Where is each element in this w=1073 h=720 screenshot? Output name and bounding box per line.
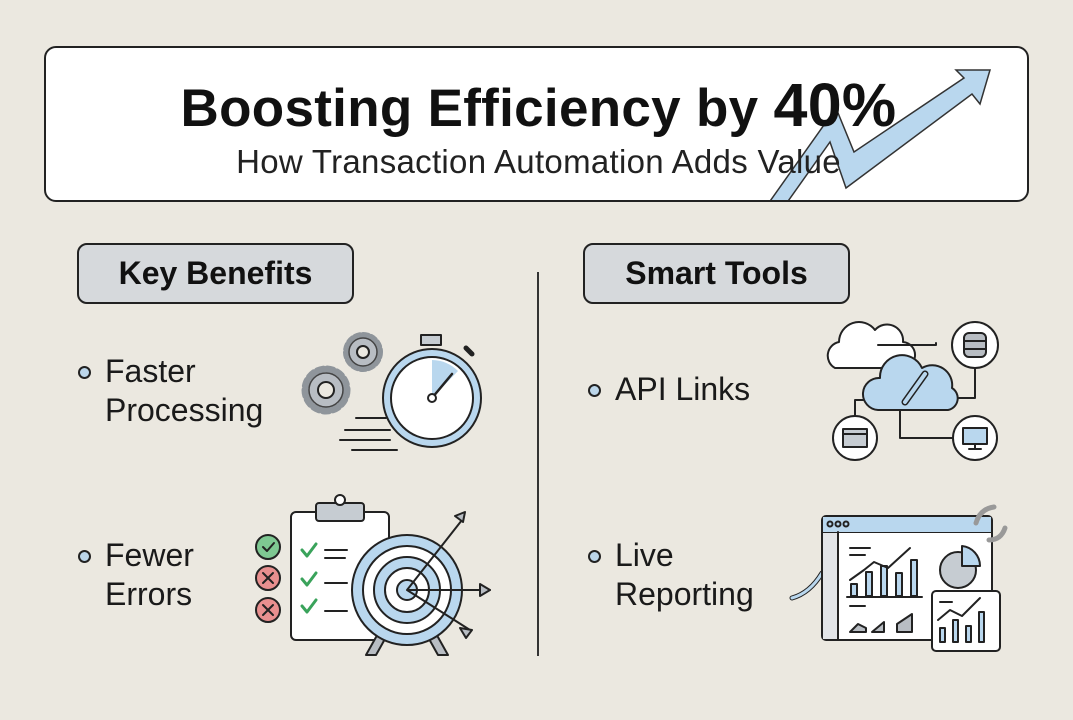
text: Fewer Errors: Fewer xyxy=(105,537,194,573)
text: Live Reporting: Reporting xyxy=(615,576,754,612)
heading: Key Benefits xyxy=(77,243,354,304)
icon: stopwatch with gears xyxy=(305,335,481,450)
heading: Smart Tools xyxy=(583,243,850,304)
divider xyxy=(537,272,539,656)
heading: Smart Tools: Smart Tools xyxy=(625,255,808,291)
text: Faster Processing: Faster xyxy=(105,353,196,389)
title: Boosting Efficiency by 40% xyxy=(181,71,896,139)
subtitle: How Transaction Automation Adds Value xyxy=(236,143,841,180)
icon: cloud network xyxy=(828,322,998,460)
icon: checklist and target xyxy=(256,495,490,655)
text: Live Reporting xyxy=(588,537,754,612)
heading: Key Benefits: Key Benefits xyxy=(119,255,312,291)
text: Fewer Errors: Errors xyxy=(105,576,192,612)
panel: title box xyxy=(44,46,1029,202)
text: API Links: API Links xyxy=(615,371,750,407)
icon: live dashboard xyxy=(792,507,1005,651)
text: Faster Processing xyxy=(78,353,263,428)
icon: rising arrow xyxy=(770,69,991,200)
text: Live Reporting: Live xyxy=(615,537,674,573)
text: Faster Processing: Processing xyxy=(105,392,263,428)
text: Fewer Errors xyxy=(78,537,194,612)
